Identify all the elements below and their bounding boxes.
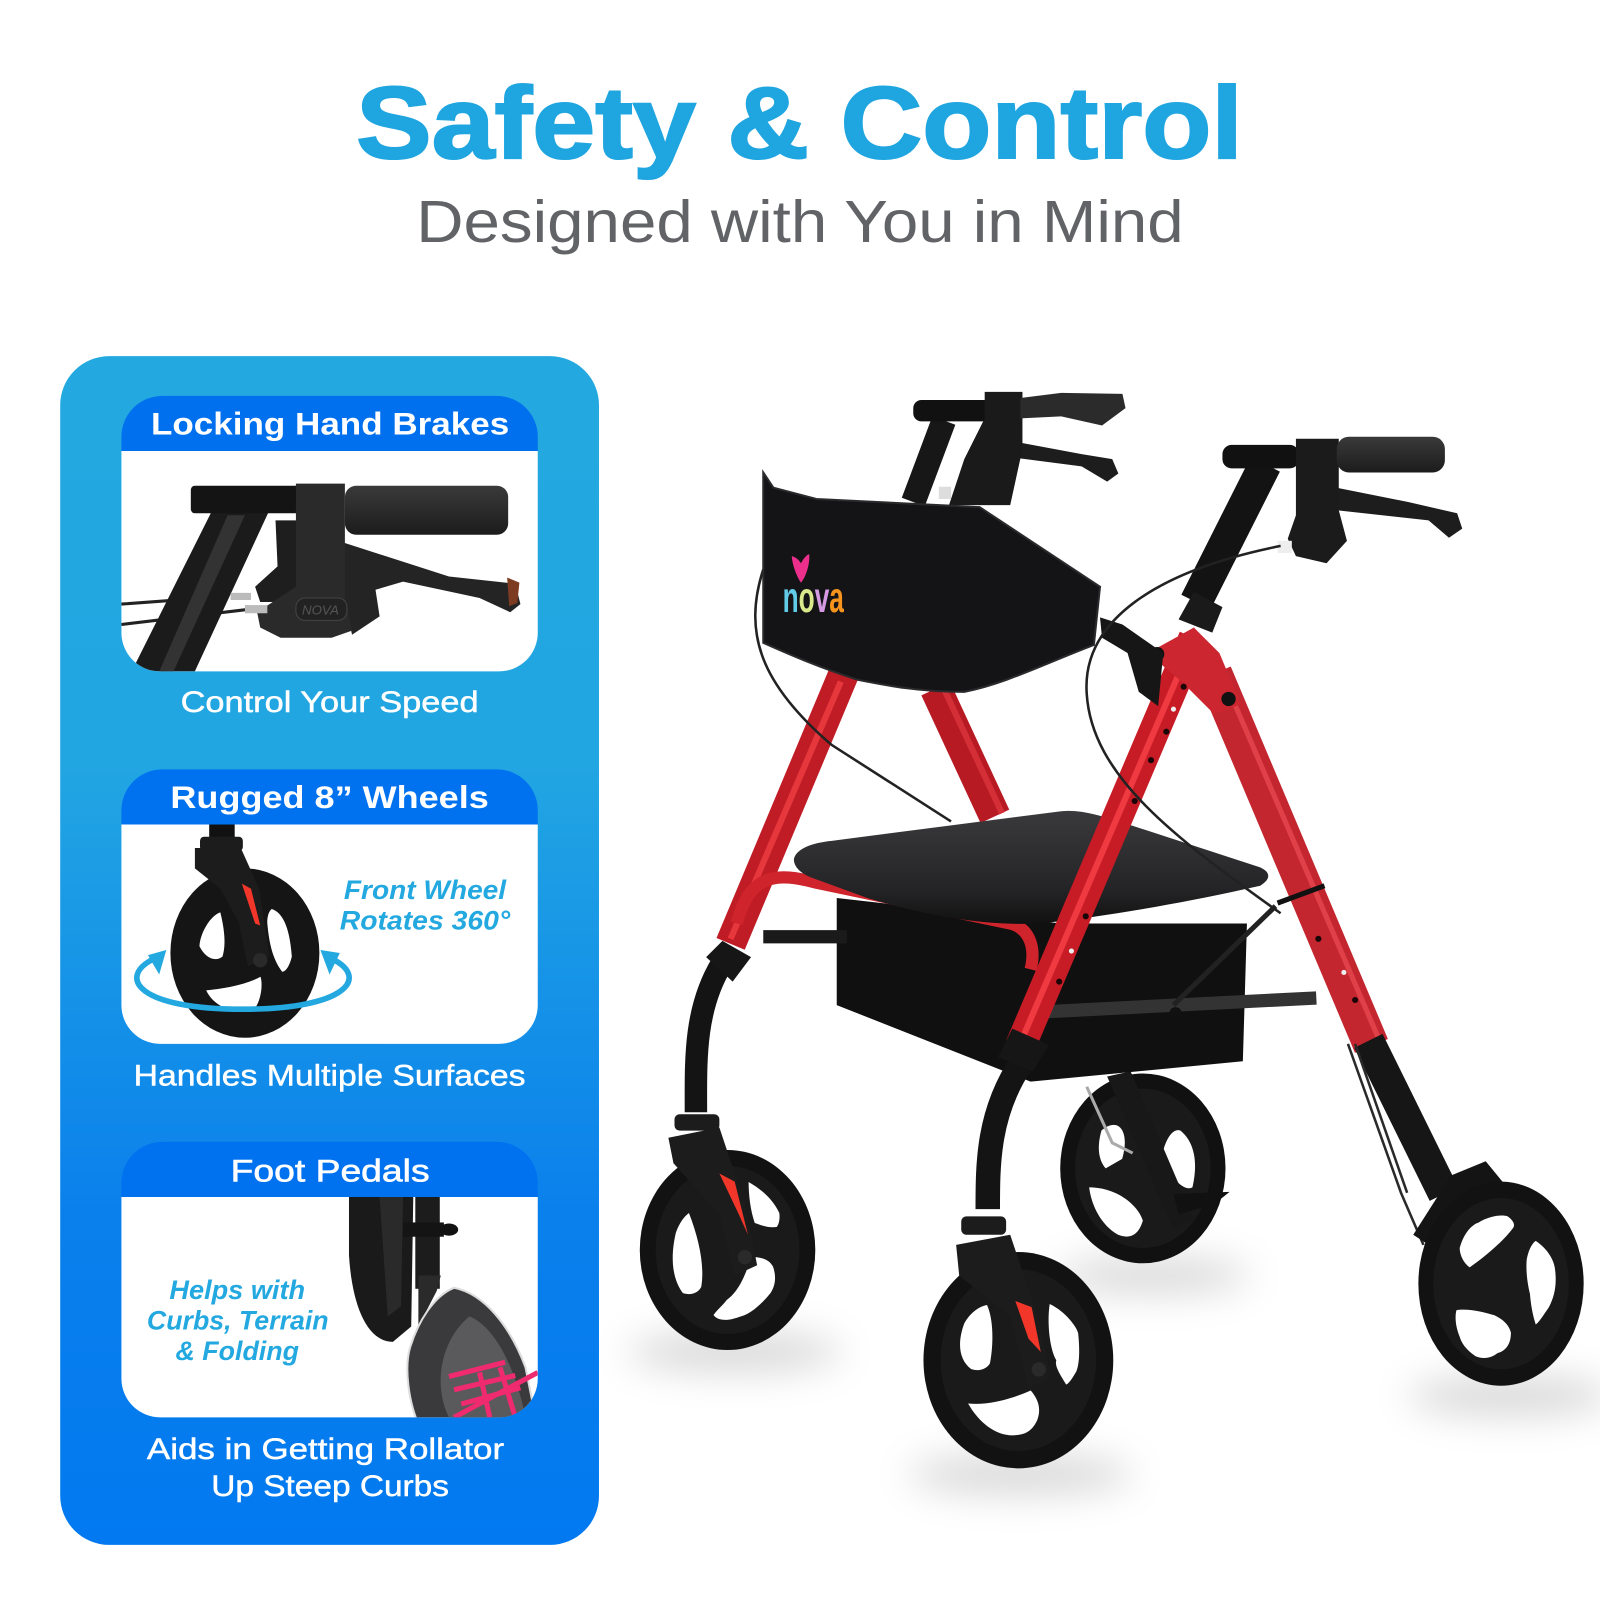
near cable [1086,546,1281,913]
front red tubes [1020,617,1380,1046]
nova logo: nova [783,574,845,622]
center fork [956,1216,1051,1388]
heading: foot pedals: Foot Pedals [231,1153,430,1189]
callout: helps with curbs: Helps with [169,1275,305,1305]
title: Safety & Control [356,66,1243,180]
caption: aids in getting rollator: Aids in Getting Rollator [147,1433,504,1466]
caption: aids in getting rollator [147,1433,504,1503]
left cable [755,569,951,821]
backrest [763,472,1100,692]
back wheel [1060,1073,1226,1263]
basket [837,898,1247,1082]
near right leg [1348,1041,1504,1245]
front left fork [668,1114,757,1276]
card: foot pedals [121,1142,538,1503]
rear red frame tubes [731,673,1002,944]
near handle [1179,437,1462,633]
caption: aids in getting rollator: Up Steep Curbs [211,1470,449,1503]
subtitle: Designed with You in Mind [416,188,1184,255]
cross bar [1036,906,1316,1019]
rear right wheel [1418,1182,1584,1386]
center leg [988,1029,1049,1209]
product: red rollator walker [628,392,1600,1495]
callout: helps with curbs [147,1275,329,1366]
heading: locking hand brakes: Locking Hand Brakes [151,406,509,442]
callout: front wheel: Rotates 360° [340,906,511,936]
seat cushion [794,811,1268,924]
callout: front wheel [340,875,511,936]
card: locking hand brakes [121,396,538,719]
embossed brake text: NOVA [302,602,339,617]
back fork and brake [1087,1071,1230,1230]
callout: helps with curbs: & Folding [176,1336,299,1366]
front left leg [696,941,751,1112]
photo: hand brake [121,484,520,673]
wheel shadows [628,1257,1600,1495]
photo: front wheel with rotation arrow [137,824,349,1038]
far handle [913,392,1126,505]
caption: control your speed: Control Your Speed [181,686,479,719]
seat frame [737,877,1032,969]
center front wheel [923,1252,1113,1468]
callout: front wheel: Front Wheel [344,875,507,905]
callout: helps with curbs: Curbs, Terrain [147,1306,329,1336]
front left wheel [640,1150,815,1350]
nova logo [783,554,845,622]
caption: handles multiple surfaces: Handles Multiple Surfaces [134,1060,526,1093]
photo: foot on pedal [349,1197,538,1429]
icon: rotation arrow [137,950,349,1009]
heading: rugged wheels: Rugged 8” Wheels [170,779,489,815]
panel: features [60,356,599,1545]
card: rugged wheels [121,769,538,1093]
